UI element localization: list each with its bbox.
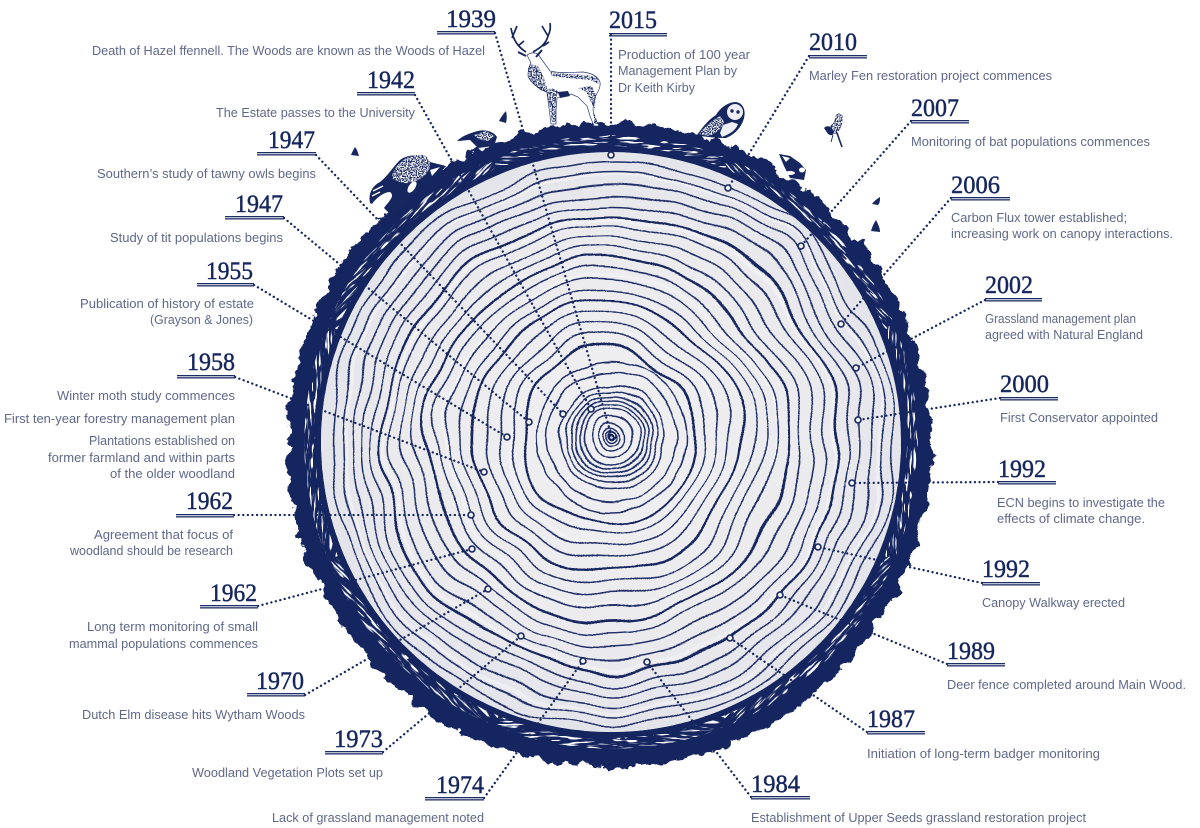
icon: small animal on bark <box>457 130 497 148</box>
timeline entry 1992 canopy walkway: Canopy Walkway erected <box>982 595 1125 610</box>
timeline entry 1973: 1973 <box>334 726 383 753</box>
timeline entry 2015: Dr Keith Kirby <box>618 80 695 95</box>
growth rings <box>330 162 892 724</box>
timeline entry 1955: Publication of history of estate <box>80 296 254 311</box>
timeline entry 1962 research <box>69 488 474 558</box>
timeline entry 1962 small mammals: 1962 <box>210 580 257 607</box>
timeline entry 1947 tit populations: 1947 <box>235 191 283 218</box>
timeline entry 1958: Winter moth study commences <box>57 388 235 403</box>
wildlife illustrations <box>351 23 880 232</box>
timeline entry 1973: Woodland Vegetation Plots set up <box>192 765 383 780</box>
timeline entry 1958: First ten-year forestry management plan <box>4 411 235 426</box>
timeline entry 1947 tawny owls: 1947 <box>268 127 315 154</box>
timeline entry 1958: former farmland and within parts <box>48 450 235 465</box>
timeline entry 2006: increasing work on canopy interactions. <box>951 226 1173 241</box>
icon: butterfly <box>499 111 507 123</box>
timeline entry 1958: 1958 <box>187 349 235 376</box>
timeline entry 2002: agreed with Natural England <box>985 327 1143 342</box>
timeline entry 1955: (Grayson & Jones) <box>150 312 253 327</box>
timeline entry 1947 tit populations <box>110 191 532 425</box>
timeline entry 1987 <box>727 635 1100 761</box>
timeline entry 2015: Production of 100 year <box>618 47 751 62</box>
timeline entry 1987: 1987 <box>867 706 915 733</box>
timeline entry 1962 research: Agreement that focus of <box>94 527 233 542</box>
timeline entry 1992 canopy walkway <box>815 544 1125 610</box>
timeline entry 2010 <box>725 29 1052 191</box>
timeline entry 2015: 2015 <box>609 7 657 34</box>
timeline entry 1939: Death of Hazel ffennell. The Woods are known as the Woods of Hazel <box>92 43 485 58</box>
timeline entry 2006: 2006 <box>951 172 1000 199</box>
timeline entry 1970: 1970 <box>256 668 304 695</box>
timeline entry 1962 research: woodland should be research <box>69 543 233 558</box>
icon: small creature on right bark <box>779 154 806 180</box>
icon: butterfly <box>351 147 359 156</box>
timeline entry 1958 <box>4 349 487 481</box>
timeline entry 1984: 1984 <box>751 771 800 798</box>
timeline entry 1962 research: 1962 <box>186 488 233 515</box>
timeline entry 1974: Lack of grassland management noted <box>272 810 484 825</box>
timeline entry 1962 small mammals: mammal populations commences <box>69 636 258 651</box>
tree cross-section <box>303 139 915 751</box>
timeline entry 1939: 1939 <box>446 6 496 33</box>
timeline entry 1973 <box>192 633 524 780</box>
timeline entry 1958: of the older woodland <box>110 466 235 481</box>
timeline entry 1992 climate change: effects of climate change. <box>997 511 1145 526</box>
timeline entry 1974: 1974 <box>436 772 484 799</box>
timeline entry 1992 climate change: ECN begins to investigate the <box>997 495 1165 510</box>
wood disc <box>321 152 901 732</box>
icon: owl <box>697 102 745 138</box>
timeline entry 2010: Marley Fen restoration project commences <box>809 68 1052 83</box>
timeline entry 1958: Plantations established on <box>89 433 235 448</box>
timeline entry 2000: First Conservator appointed <box>1000 410 1158 425</box>
timeline entry 1987: Initiation of long-term badger monitoring <box>867 746 1100 761</box>
timeline entry 2006: Carbon Flux tower established; <box>951 210 1127 225</box>
timeline entry 1939 <box>92 6 616 440</box>
timeline entry 1984: Establishment of Upper Seeds grassland restoration project <box>751 810 1086 825</box>
timeline entry 2010: 2010 <box>809 29 857 56</box>
timeline entry 1970 <box>82 586 491 722</box>
timeline entry 1974 <box>272 658 586 825</box>
timeline entry 1955: 1955 <box>206 258 253 285</box>
timeline entry 2006 <box>838 172 1173 327</box>
timeline entry 2007: Monitoring of bat populations commences <box>911 134 1150 149</box>
timeline entry 2007: 2007 <box>911 95 959 122</box>
timeline entry 1942: The Estate passes to the University <box>216 105 415 120</box>
icon: stag <box>511 23 600 126</box>
timeline entry 1947 tit populations: Study of tit populations begins <box>110 230 283 245</box>
timeline entry 1989: 1989 <box>947 638 995 665</box>
timeline entry 2000: 2000 <box>1000 371 1049 398</box>
timeline entry 1955 <box>80 258 510 440</box>
icon: butterfly <box>871 220 880 232</box>
timeline entry 1970: Dutch Elm disease hits Wytham Woods <box>82 707 305 722</box>
timeline entry 1962 small mammals <box>69 546 475 651</box>
timeline entry 1962 small mammals: Long term monitoring of small <box>87 619 258 634</box>
timeline entry 1992 canopy walkway: 1992 <box>982 556 1030 583</box>
timeline entry 1942 <box>216 67 594 412</box>
icon: badger <box>369 155 446 216</box>
timeline entry 1942: 1942 <box>367 67 415 94</box>
timeline entry 2002: Grassland management plan <box>985 311 1136 326</box>
timeline entry 1984 <box>644 659 1086 825</box>
timeline entry 1989: Deer fence completed around Main Wood. <box>947 677 1186 692</box>
timeline entry 2002 <box>853 272 1143 371</box>
bark ring <box>303 139 915 751</box>
timeline entry 1947 tawny owls: Southern’s study of tawny owls begins <box>97 166 316 181</box>
timeline entry 1947 tawny owls <box>97 127 566 417</box>
icon: flying bird <box>824 113 843 147</box>
icon: butterfly <box>872 197 880 205</box>
timeline entry 2000 <box>855 371 1158 425</box>
timeline entry 1992 climate change: 1992 <box>998 456 1046 483</box>
timeline entry 2015 <box>608 7 751 158</box>
timeline entry 1992 climate change <box>849 456 1165 526</box>
timeline entry 2007 <box>798 95 1150 249</box>
timeline entry 2002: 2002 <box>985 272 1033 299</box>
timeline entry 2015: Management Plan by <box>618 63 737 78</box>
timeline entry 1989 <box>777 592 1186 692</box>
